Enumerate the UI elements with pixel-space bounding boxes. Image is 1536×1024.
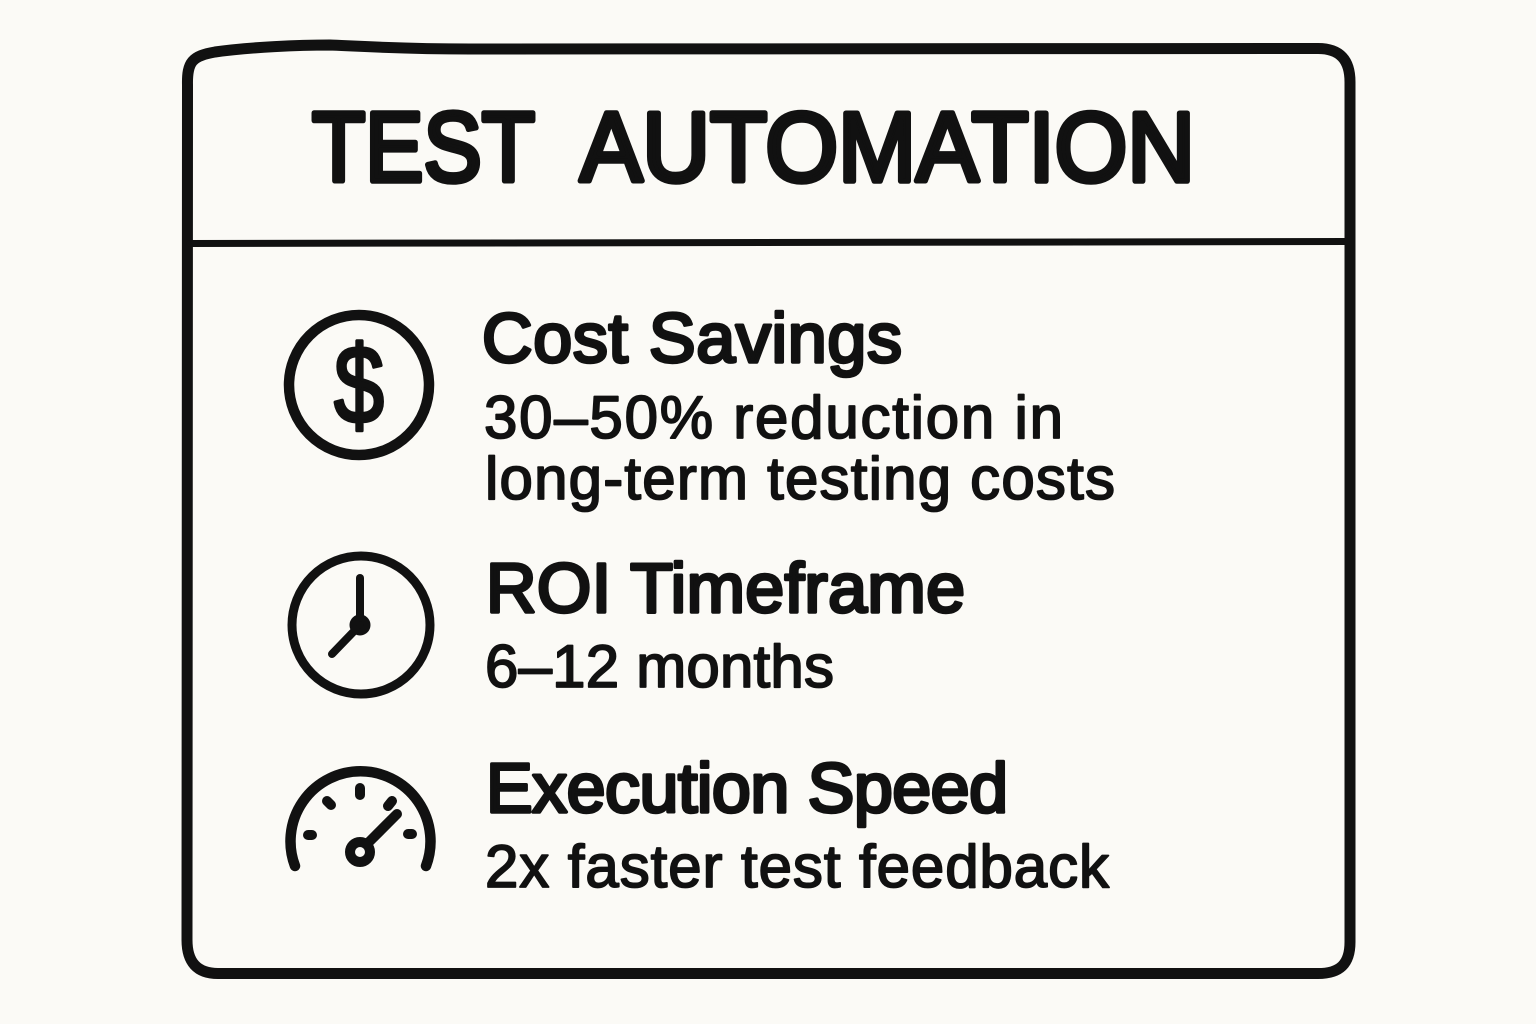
title: TEST bbox=[312, 92, 535, 202]
title bbox=[312, 92, 1195, 202]
text: cost savings detail: long-term testing costs bbox=[485, 445, 1115, 512]
text: execution detail: 2x faster test feedback bbox=[485, 833, 1110, 900]
icon: clock bbox=[292, 556, 430, 694]
heading: execution speed: Execution Speed bbox=[486, 749, 1008, 827]
title: AUTOMATION bbox=[580, 92, 1195, 202]
text: cost savings detail: 30–50% reduction in bbox=[484, 384, 1063, 451]
text: roi detail: 6–12 months bbox=[485, 633, 834, 700]
text: cost savings detail bbox=[484, 384, 1115, 512]
icon: speedometer bbox=[290, 771, 430, 866]
panel: outer card bbox=[187, 45, 1350, 974]
icon: dollar: $ bbox=[334, 324, 384, 447]
heading: roi timeframe: ROI Timeframe bbox=[486, 549, 965, 627]
icon: dollar bbox=[289, 315, 429, 455]
heading: cost savings: Cost Savings bbox=[482, 299, 902, 377]
